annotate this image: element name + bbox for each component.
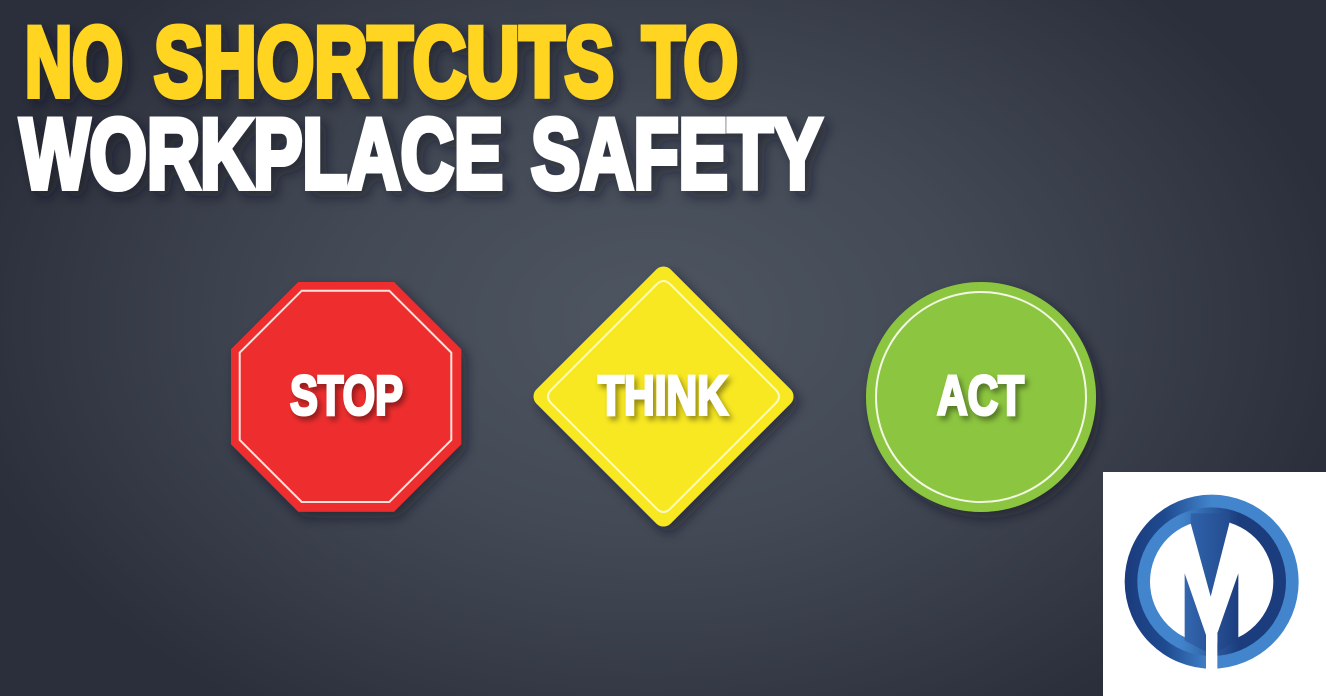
title line 1: No Shortcuts To: NO — [25, 6, 123, 117]
title line 2: Workplace Safety: WORKPLACE — [20, 98, 503, 209]
octagon inner outline — [240, 291, 451, 502]
yellow diamond — [544, 276, 784, 516]
stop sign — [231, 282, 461, 512]
green circle — [866, 282, 1096, 512]
title line 1: No Shortcuts To: TO — [642, 6, 738, 117]
diamond inner outline — [548, 281, 779, 512]
red octagon — [231, 282, 461, 512]
think sign — [544, 276, 784, 516]
title line 1: No Shortcuts To: SHORTCUTS — [154, 6, 614, 117]
think label: THINK — [598, 364, 728, 426]
icon: blue M logo — [1125, 495, 1299, 672]
circle inner outline — [876, 292, 1086, 502]
stop label: STOP — [290, 364, 403, 426]
title line 2: Workplace Safety: SAFETY — [531, 98, 822, 209]
logo panel — [1103, 472, 1326, 696]
act sign — [866, 282, 1096, 512]
act label: ACT — [937, 364, 1024, 426]
title — [20, 6, 822, 209]
white logo background — [1103, 472, 1326, 696]
